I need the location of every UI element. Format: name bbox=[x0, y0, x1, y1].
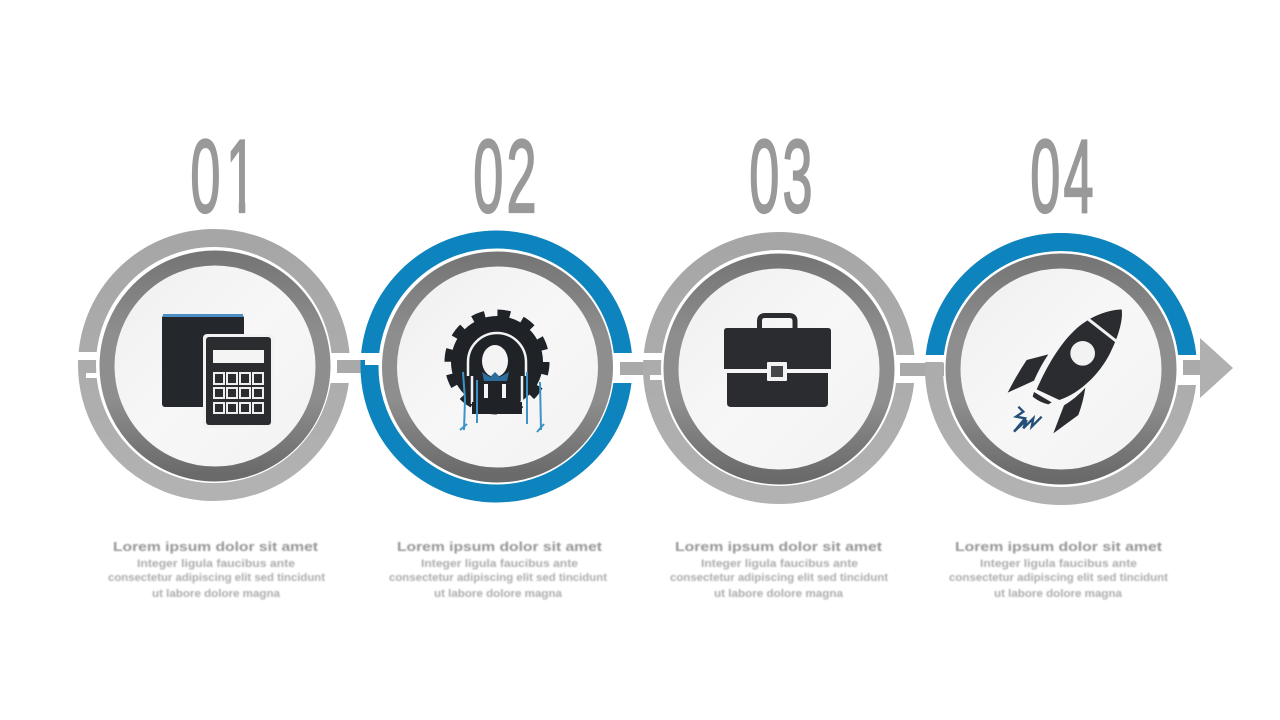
step 02 panel bbox=[355, 118, 658, 600]
number 02: 02 bbox=[473, 118, 540, 235]
step 04 panel bbox=[920, 118, 1233, 600]
description 01: Integer ligula faucibus ante bbox=[137, 558, 295, 570]
connector 02 to 03 bbox=[620, 362, 658, 375]
arrow to finish bbox=[1183, 338, 1233, 398]
description 01: Lorem ipsum dolor sit amet bbox=[113, 539, 319, 554]
number 01: 01 bbox=[190, 118, 256, 235]
inner ring 04 bbox=[953, 261, 1169, 477]
description 01 bbox=[108, 539, 325, 600]
infographic: four step timeline bbox=[78, 138, 1233, 600]
description 02: consectetur adipiscing elit sed tincidunt bbox=[389, 572, 607, 584]
outer ring 04 bbox=[920, 242, 1201, 496]
description 01: consectetur adipiscing elit sed tincidunt bbox=[108, 572, 325, 584]
description 02: Integer ligula faucibus ante bbox=[421, 558, 578, 570]
description 04: consectetur adipiscing elit sed tincidunt bbox=[949, 572, 1168, 584]
inner ring 01 bbox=[107, 258, 323, 474]
connector 01 to 02 bbox=[337, 360, 376, 373]
description 03: Integer ligula faucibus ante bbox=[701, 558, 858, 570]
description 04 bbox=[949, 539, 1168, 600]
description 04: Integer ligula faucibus ante bbox=[980, 558, 1137, 570]
step 01 panel bbox=[70, 118, 376, 600]
description 02 bbox=[389, 539, 607, 600]
inner ring 03 bbox=[671, 261, 887, 477]
description 02: Lorem ipsum dolor sit amet bbox=[397, 539, 603, 554]
outer ring 03 bbox=[640, 241, 922, 495]
description 02: ut labore dolore magna bbox=[434, 588, 563, 600]
description 01: ut labore dolore magna bbox=[152, 588, 281, 600]
outer ring 02 bbox=[355, 240, 640, 494]
icon: gear with drips bbox=[449, 314, 545, 432]
outer ring 01 bbox=[70, 238, 358, 492]
icon: briefcase bbox=[724, 316, 831, 407]
description 03: ut labore dolore magna bbox=[714, 588, 844, 600]
icon: rocket bbox=[1008, 309, 1122, 433]
description 03: Lorem ipsum dolor sit amet bbox=[675, 539, 883, 554]
inner ring 02 bbox=[390, 259, 606, 475]
step 03 panel bbox=[640, 118, 944, 600]
description 04: ut labore dolore magna bbox=[994, 588, 1123, 600]
connector 03 to 04 bbox=[900, 363, 944, 376]
description 03: consectetur adipiscing elit sed tincidunt bbox=[670, 572, 888, 584]
number 03: 03 bbox=[749, 118, 816, 235]
description 03 bbox=[670, 539, 888, 600]
number 04: 04 bbox=[1030, 118, 1097, 235]
icon: calculator and book bbox=[162, 314, 274, 428]
description 04: Lorem ipsum dolor sit amet bbox=[955, 539, 1163, 554]
